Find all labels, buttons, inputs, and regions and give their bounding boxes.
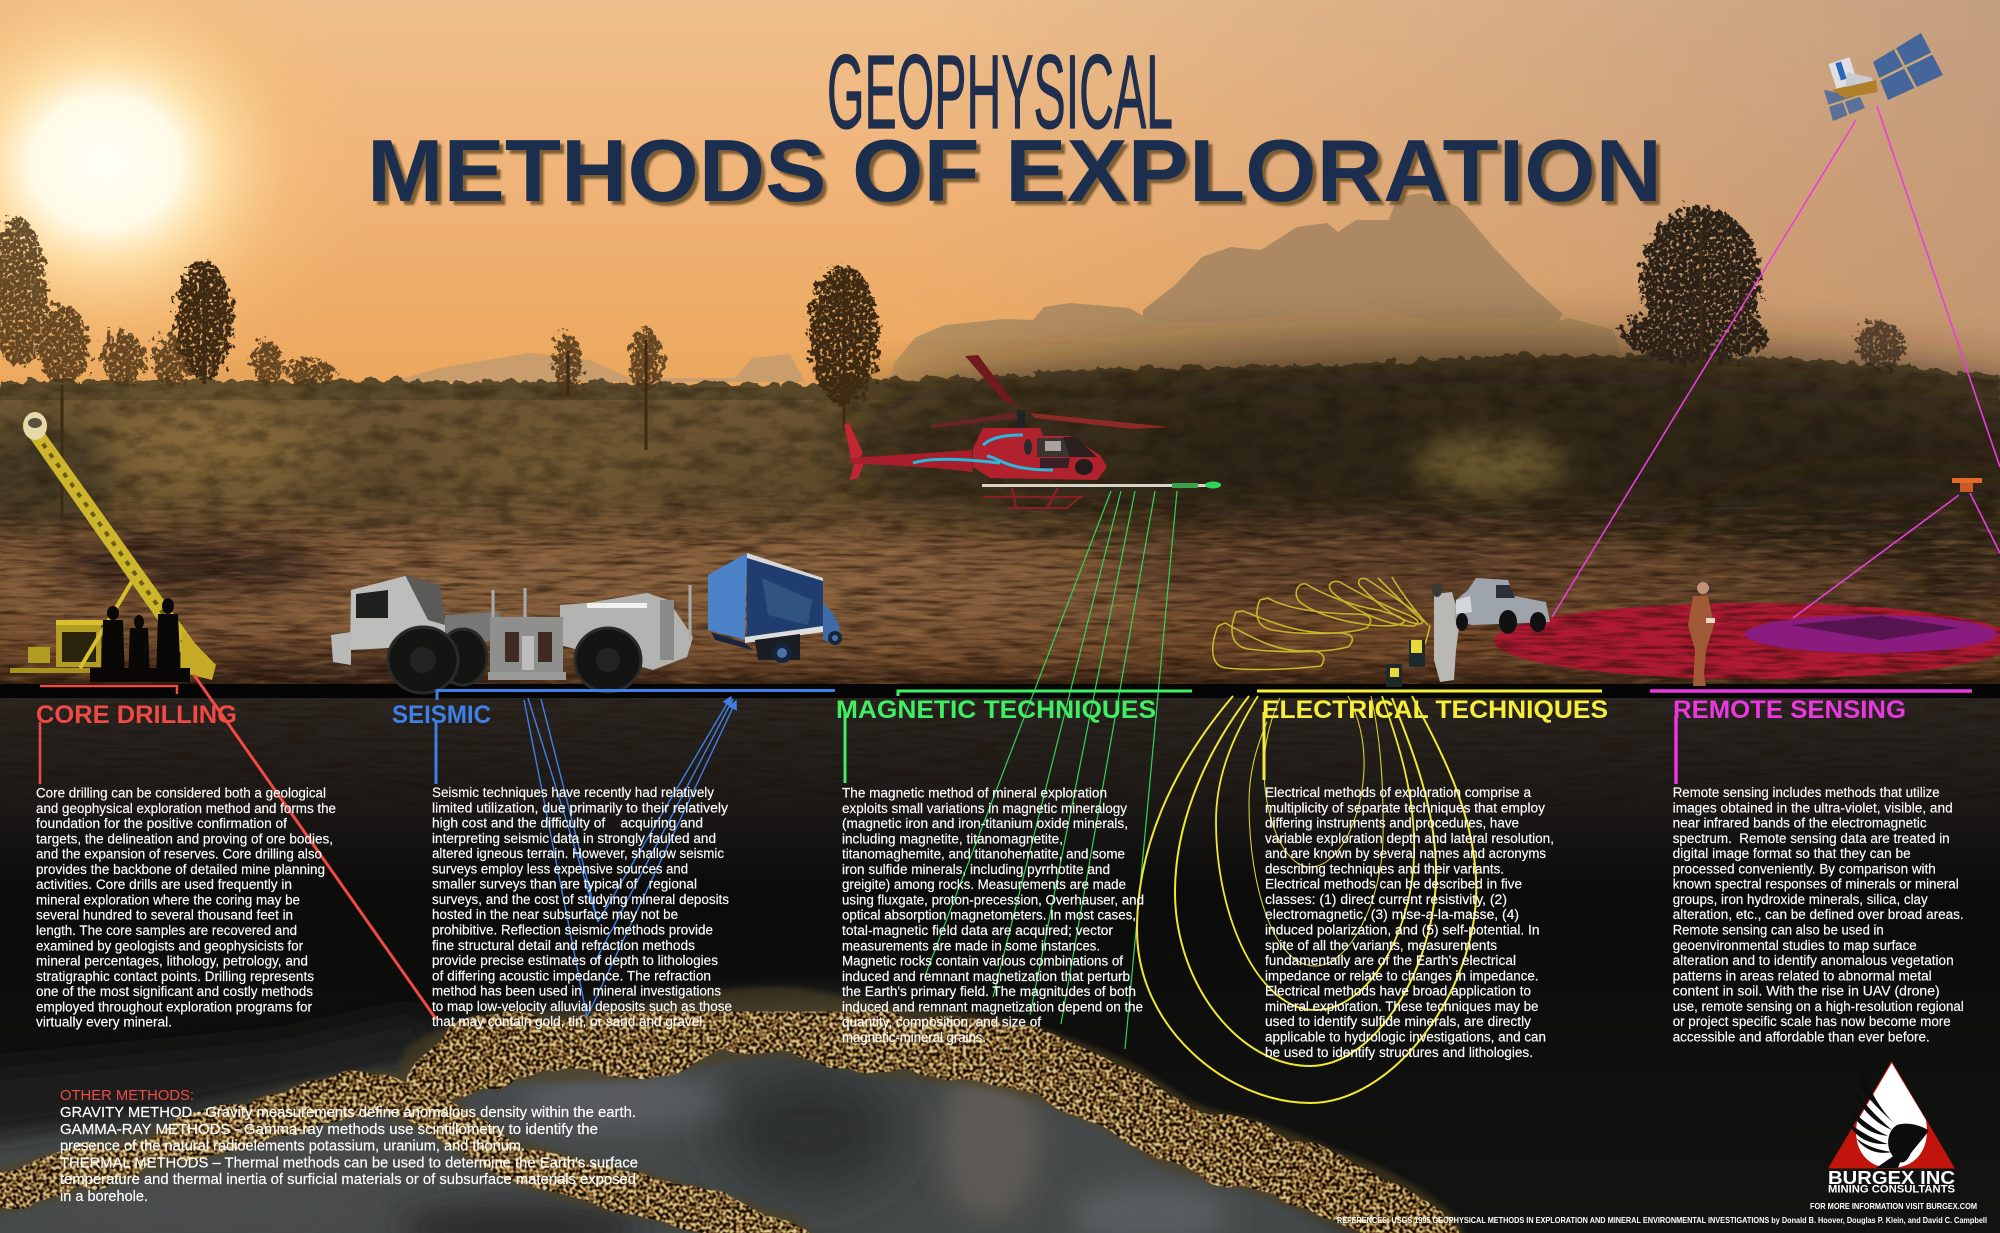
panel: other methods xyxy=(60,1088,638,1205)
background: tree silhouettes xyxy=(0,206,1905,405)
text: seismic body: surveys employ less expensive sources and xyxy=(432,861,688,876)
text: magnetic body: total-magnetic field data are acquired; vector xyxy=(842,923,1114,938)
icon: drone xyxy=(1952,478,1982,498)
text: other methods body: in a borehole. xyxy=(60,1189,148,1205)
text: other methods body: presence of the natural radioelements potassium, uranium, and thorium. xyxy=(60,1139,525,1155)
text: electrical body: multiplicity of separate techniques that employ xyxy=(1265,800,1545,815)
text: magnetic body: induced and remnant magnetization that perturb xyxy=(842,969,1130,984)
remote sensing signal lines xyxy=(1552,106,2000,618)
icon: electrical survey wire loops xyxy=(1213,577,1430,669)
text: core drilling body: foundation for the positive confirmation of xyxy=(36,816,287,831)
text: magnetic body: including magnetite, titanomagnetite, xyxy=(842,831,1063,846)
icon: blue box truck xyxy=(708,553,842,663)
purple drone scan ellipse xyxy=(1745,615,1997,653)
text: seismic body: hosted in the near subsurface may not be xyxy=(432,907,678,922)
text: core drilling body: mineral percentages, lithology, petrology, and xyxy=(36,954,308,969)
text: other methods body: GRAVITY METHOD - Gravity measurements define anomalous density within the earth. xyxy=(60,1105,636,1121)
text: magnetic body: (magnetic iron and iron-titanium oxide minerals, xyxy=(842,816,1128,831)
drill crew silhouettes xyxy=(101,598,181,682)
text: remote sensing body: or project specific scale has now become more xyxy=(1673,1014,1951,1029)
panel: magnetic techniques xyxy=(836,691,1192,1045)
text: magnetic body: iron sulfide minerals, including pyrrhotite and xyxy=(842,862,1110,877)
text: remote sensing body: Remote sensing includes methods that utilize xyxy=(1673,785,1940,800)
logo: tagline: MINING CONSULTANTS xyxy=(1828,1184,1955,1196)
text: electrical body: mineral exploration. These techniques may be xyxy=(1265,999,1538,1014)
text: seismic body: altered igneous terrain. However, shallow seismic xyxy=(432,846,724,861)
text: seismic body: of differing acoustic impedance. The refraction xyxy=(432,968,711,983)
truck wheels xyxy=(388,627,641,693)
text: core drilling body: and geophysical exploration method and forms the xyxy=(36,801,336,816)
text: magnetic body: quantity, composition, and size of xyxy=(842,1015,1041,1030)
icon: satellite xyxy=(1824,33,1943,121)
logo: Burgex xyxy=(1828,1061,1955,1196)
text: remote sensing body: digital image format so that they can be xyxy=(1673,846,1911,861)
text: electrical body: Electrical methods of exploration comprise a xyxy=(1265,785,1531,800)
text: remote sensing body: content in soil. With the rise in UAV (drone) xyxy=(1673,984,1940,999)
text: core drilling body: employed throughout exploration programs for xyxy=(36,999,312,1014)
text: magnetic body: titanomaghemite, and titanohematite, and some xyxy=(842,847,1125,862)
text: electrical body: classes: (1) direct current resistivity, (2) xyxy=(1265,892,1507,907)
text: electrical body: and are known by several names and acronyms xyxy=(1265,846,1546,861)
heading: magnetic techniques: MAGNETIC TECHNIQUES xyxy=(836,696,1156,724)
logo: triangle and eagle xyxy=(1828,1061,1955,1168)
text: core drilling body: examined by geologists and geophysicists for xyxy=(36,938,303,953)
text: remote sensing body: spectrum. Remote sensing data are treated in xyxy=(1673,831,1950,846)
text: magnetic body: The magnetic method of mineral exploration xyxy=(842,786,1107,800)
text: remote sensing body: known spectral responses of minerals or mineral xyxy=(1673,877,1959,892)
text: seismic body: prohibitive. Reflection seismic methods provide xyxy=(432,922,713,938)
text: magnetic body: Magnetic rocks contain various combinations of xyxy=(842,954,1123,969)
text: remote sensing body: processed conveniently. By comparison with xyxy=(1673,861,1936,876)
text: core drilling body: mineral exploration where the coring may be xyxy=(36,892,300,908)
seismic ray lines xyxy=(524,697,736,1017)
text: other methods body: THERMAL METHODS – Thermal methods can be used to determine the Earth's surface xyxy=(60,1155,638,1171)
text: electrical body xyxy=(1265,785,1554,1060)
text: core drilling body: several hundred to several thousand feet in xyxy=(36,908,293,923)
title: GEOPHYSICAL xyxy=(827,34,1173,151)
text: core drilling body xyxy=(36,786,336,1030)
text: core drilling body: stratigraphic contact points. Drilling represents xyxy=(36,969,314,984)
text: electrical body: applicable to hydrologic investigations, and can xyxy=(1265,1030,1546,1044)
text: magnetic body: magnetic-mineral grains. xyxy=(842,1030,986,1045)
text: seismic body: to map low-velocity alluvial deposits such as those xyxy=(432,999,732,1014)
text: other methods body xyxy=(60,1105,638,1205)
bracket: electrical techniques xyxy=(1257,691,1602,780)
text: seismic body: interpreting seismic data in strongly faulted and xyxy=(432,831,716,846)
text: magnetic body: using fluxgate, proton-precession, Overhauser, and xyxy=(842,892,1144,908)
background: distant mountain and range xyxy=(390,193,1620,385)
text: other methods body: temperature and thermal inertia of surficial materials or of subsurface materials exposed xyxy=(60,1172,636,1188)
panel: remote sensing xyxy=(1650,691,1972,1044)
text: core drilling body: length. The core samples are recovered and xyxy=(36,923,297,938)
text: remote sensing body: geoenvironmental studies to map surface xyxy=(1673,938,1917,953)
title: line 2: METHODS OF EXPLORATION xyxy=(367,121,1662,220)
heading: other methods: OTHER METHODS: xyxy=(60,1088,194,1104)
text: remote sensing body xyxy=(1673,785,1964,1044)
text: magnetic body: induced and remnant magnetization depend on the xyxy=(842,999,1143,1014)
text: other methods body: GAMMA-RAY METHODS - Gamma-ray methods use scintillometry to identify the xyxy=(60,1122,598,1138)
text: electrical body: fundamentally are of the Earth's electrical xyxy=(1265,953,1516,968)
text: remote sensing body: groups, iron hydroxide minerals, silica, clay xyxy=(1673,892,1928,907)
text: seismic body: high cost and the difficulty of acquiring and xyxy=(432,816,703,831)
text: electrical body: differing instruments and procedures, have xyxy=(1265,816,1519,831)
icon: survey vehicle xyxy=(1454,578,1550,634)
text: electrical body: variable exploration depth and lateral resolution, xyxy=(1265,831,1554,846)
text: electrical body: induced polarization, and (5) self-potential. In xyxy=(1265,922,1540,938)
text: magnetic body: the Earth's primary field. The magnitudes of both xyxy=(842,984,1136,999)
background: tree trunks xyxy=(62,230,1701,520)
text: seismic body: limited utilization, due primarily to their relatively xyxy=(432,800,728,815)
text: seismic body: that may contain gold, tin, or sand and gravel. xyxy=(432,1014,706,1029)
text: seismic body: Seismic techniques have recently had relatively xyxy=(432,785,714,800)
icon: drill rig xyxy=(10,412,216,682)
text: seismic body: provide precise estimates of depth to lithologies xyxy=(432,953,718,968)
text: remote sensing body: use, remote sensing on a high-resolution regional xyxy=(1673,999,1964,1014)
logo: company name: BURGEX INC xyxy=(1828,1168,1955,1188)
text: electrical body: electromagnetic, (3) mise-a-la-masse, (4) xyxy=(1265,907,1519,922)
text: electrical body: spite of all the variants, measurements xyxy=(1265,938,1497,953)
text: remote sensing body: alteration and to identify anomalous vegetation xyxy=(1673,953,1954,968)
text: seismic body: surveys, and the cost of studying mineral deposits xyxy=(432,892,729,907)
heading: seismic: SEISMIC xyxy=(392,701,491,729)
heading: electrical techniques: ELECTRICAL TECHNIQUES xyxy=(1262,696,1608,724)
text: magnetic body: optical absorption magnetometers. In most cases, xyxy=(842,908,1136,923)
title xyxy=(367,34,1662,220)
panel: core drilling xyxy=(36,686,336,1030)
text: electrical body: used to identify sulfide minerals, are directly xyxy=(1265,1014,1531,1029)
text: core drilling body: targets, the delineation and proving of ore bodies, xyxy=(36,831,333,846)
footer: website note: FOR MORE INFORMATION VISIT BURGEX.COM xyxy=(1810,1201,1977,1211)
red survey ellipse xyxy=(1494,603,2000,679)
text: seismic body xyxy=(432,785,732,1029)
magnetic survey lines xyxy=(925,491,1177,1049)
text: remote sensing body: images obtained in the ultra-violet, visible, and xyxy=(1673,800,1953,815)
black divider band xyxy=(0,684,2000,698)
text: seismic body: smaller surveys than are typical of regional xyxy=(432,877,697,892)
text: seismic body: method has been used in mineral investigations xyxy=(432,984,721,999)
text: electrical body: impedance or relate to changes in impedance. xyxy=(1265,968,1538,983)
text: remote sensing body: accessible and affordable than ever before. xyxy=(1673,1030,1930,1044)
background: sunset sky xyxy=(0,0,2000,403)
bracket: seismic xyxy=(436,690,835,784)
text: electrical body: be used to identify structures and lithologies. xyxy=(1265,1045,1533,1060)
text: magnetic body xyxy=(842,786,1144,1045)
bracket: magnetic techniques xyxy=(845,691,1192,783)
text: core drilling body: Core drilling can be considered both a geological xyxy=(36,786,326,800)
text: core drilling body: virtually every mineral. xyxy=(36,1015,172,1030)
background: scrubland and dirt ground xyxy=(0,350,2000,700)
text: remote sensing body: patterns in areas related to abnormal metal xyxy=(1673,968,1932,983)
text: core drilling body: and the expansion of reserves. Core drilling also xyxy=(36,847,322,862)
icon: person operating drone xyxy=(1688,582,1715,686)
panel: electrical techniques xyxy=(1257,691,1608,1060)
text: remote sensing body: alteration, etc., can be defined over broad areas. xyxy=(1673,907,1964,922)
text: core drilling body: one of the most significant and costly methods xyxy=(36,984,313,999)
core drilling target line xyxy=(194,675,436,1019)
text: electrical body: describing techniques and their variants. xyxy=(1265,861,1504,876)
text: core drilling body: provides the backbone of detailed mine planning xyxy=(36,862,325,877)
text: magnetic body: exploits small variations in magnetic mineralogy xyxy=(842,801,1127,816)
text: magnetic body: measurements are made in some instances. xyxy=(842,938,1100,953)
text: electrical body: Electrical methods can be described in five xyxy=(1265,877,1522,892)
icon: helicopter xyxy=(844,355,1221,508)
text: remote sensing body: near infrared bands of the electromagnetic xyxy=(1673,816,1927,831)
bracket: remote sensing xyxy=(1650,691,1972,784)
icon: field technician with equipment xyxy=(1386,583,1460,687)
lower panel background xyxy=(0,696,2000,1233)
text: remote sensing body: Remote sensing can also be used in xyxy=(1673,922,1884,938)
text: electrical body: Electrical methods have broad application to xyxy=(1265,984,1531,999)
heading: remote sensing: REMOTE SENSING xyxy=(1673,696,1906,724)
text: core drilling body: activities. Core drills are used frequently in xyxy=(36,877,292,892)
text: magnetic body: greigite) among rocks. Measurements are made xyxy=(842,877,1126,892)
panel: seismic xyxy=(392,690,835,1029)
heading: core drilling: CORE DRILLING xyxy=(36,701,237,729)
bracket: core drilling xyxy=(40,686,177,784)
text: seismic body: fine structural detail and refraction methods xyxy=(432,938,695,953)
electrical current loops xyxy=(1137,696,1476,1103)
icon: seismic vibrator truck xyxy=(331,575,693,693)
